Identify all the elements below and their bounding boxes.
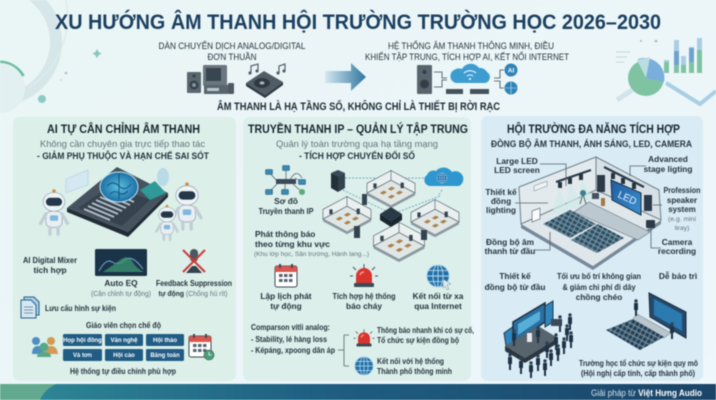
arrow: transition <box>325 63 366 91</box>
label: zone announcements: (Khu lớp học, Sân trường, Hành lang...) <box>254 251 369 258</box>
panel subtitle: Quản lý toàn trường qua hạ tầng mạng <box>276 139 438 150</box>
panel heading: AI TỰ CÂN CHỈNH ÂM THANH <box>47 121 200 136</box>
label: zone announcements <box>254 229 369 258</box>
label: feedback suppression: tự động (Chống hú rít) <box>158 289 228 298</box>
heading: to smart system <box>365 40 569 62</box>
title: XU HƯỚNG ÂM THANH HỘI TRƯỜNG TRƯỜNG HỌC 2026–2030 <box>55 10 661 34</box>
illustration: seminar audience <box>606 293 686 350</box>
label: IP diagram <box>258 196 314 216</box>
callout: camera recording: Camera <box>662 237 693 247</box>
comparison with analog <box>251 323 335 355</box>
callout: professional speaker system: system <box>668 205 696 214</box>
comparison with analog: - Stability, lé hàng loss <box>251 335 327 344</box>
label: save event configuration: Lưu cấu hình sự kiện <box>45 303 116 313</box>
benefit: smart city <box>377 357 452 376</box>
callout: professional speaker system <box>653 186 701 232</box>
mode buttons <box>63 334 184 361</box>
benefit: synchronized design: đồng bộ từ đầu <box>485 282 545 292</box>
callout: synchronized sound <box>485 232 550 256</box>
mode buttons: Hội thảo <box>153 338 177 344</box>
mode buttons: Hội cảo <box>113 353 135 359</box>
label: auto EQ: (Cân chỉnh tự động) <box>91 289 151 298</box>
icon: fire alarm siren <box>350 264 378 287</box>
illustration: campus network <box>323 167 463 262</box>
callout: camera recording <box>651 229 696 256</box>
illustration: hall cutaway: LED <box>616 190 638 208</box>
label: auto schedule: tự động <box>270 301 302 311</box>
mode buttons: Băng toán <box>150 353 180 359</box>
icon: feedback suppression <box>183 249 205 273</box>
label: fire alarm integration: Tích hợp hệ thống <box>332 291 396 301</box>
footer credit: Giải pháp từ Việt Hưng Audio <box>591 388 702 398</box>
illustration: AI digital mixer with brain and robots <box>40 167 201 240</box>
label: feedback suppression: Feedback Suppression <box>156 278 232 288</box>
label: remote internet connection: Kết nối từ xa <box>413 291 464 301</box>
callout: advanced stage lighting <box>630 154 692 176</box>
callout: professional speaker system: speaker <box>667 196 697 205</box>
label: IP diagram: Truyền thanh IP <box>258 206 314 216</box>
callout: large LED screen <box>494 156 566 186</box>
callout: synchronized sound: Đồng bộ âm <box>486 237 534 247</box>
benefit: space and cost optimization <box>557 271 641 302</box>
icon: analog equipment <box>187 64 286 98</box>
icon: schedule calendar <box>275 264 297 287</box>
callout: synchronized sound: thanh từ đầu <box>485 246 535 256</box>
benefit: space and cost optimization: chồng chéo <box>576 292 622 302</box>
benefit: easy maintenance: Dễ bảo trì <box>659 271 697 281</box>
icon: document stack <box>21 297 39 318</box>
panel: AI auto tuning <box>13 117 236 381</box>
panel subtitle: Không cần chuyên gia trực tiếp thao tác <box>40 139 205 150</box>
label: auto EQ: Auto EQ <box>104 278 138 288</box>
icon: calendar with clock <box>189 334 214 360</box>
heading: core message: ÂM THANH LÀ HẠ TẦNG SỐ, KHÔNG CHỈ LÀ THIẾT BỊ RỜI RẠC <box>217 99 500 113</box>
label: IP diagram: Sơ đồ <box>274 196 298 206</box>
panel subtitle: - TÍCH HỢP CHUYỂN ĐỔI SỐ <box>299 150 415 161</box>
heading: to smart system: KHIỂN TẬP TRUNG, TÍCH HỢP AI, KẾT NỐI INTERNET <box>365 51 569 62</box>
mode buttons: Văn nghệ <box>110 338 138 344</box>
caption: large scale events: Trường học tổ chức sự kiện quy mô <box>579 359 698 368</box>
connector arrows <box>338 335 349 366</box>
label: auto schedule <box>260 291 312 311</box>
icon: smart network system <box>417 64 518 94</box>
label: auto schedule: Lập lịch phát <box>260 291 312 301</box>
benefit: quick alerts <box>377 326 474 345</box>
label: remote internet connection <box>413 291 464 311</box>
benefit: synchronized design: Thiết kế <box>499 271 531 281</box>
panel subtitle <box>37 139 209 161</box>
icon: people <box>32 337 58 357</box>
callout: professional speaker system: (e.g. mini <box>668 216 696 223</box>
panel heading <box>491 121 692 149</box>
comparison with analog: Comparson vítli analog: <box>251 323 330 332</box>
panel heading: TRUYỀN THANH IP – QUẢN LÝ TẬP TRUNG <box>248 121 468 136</box>
icon: smart network system: AI <box>508 68 514 74</box>
caption: large scale events <box>579 359 698 378</box>
label: AI digital mixer <box>23 255 78 275</box>
label: teacher selects mode: Giáo viên chọn chế độ <box>86 320 161 330</box>
benefit: smart city: Kết nối với hệ thống <box>377 357 444 366</box>
callout: camera recording: recording <box>658 246 696 256</box>
callout: professional speaker system: Profession <box>664 186 701 195</box>
heading: from analog: ĐƠN THUẦN <box>208 52 256 62</box>
panel: IP broadcast <box>243 117 474 381</box>
callout: lighting design: Thiết kế <box>485 187 517 197</box>
label: auto EQ <box>91 278 151 298</box>
icon: internet globe <box>427 265 451 290</box>
panel heading: ĐỒNG BỘ ÂM THANH, ÁNH SÁNG, LED, CAMERA <box>491 138 692 149</box>
callout: lighting design: đồng <box>491 196 511 206</box>
callout: advanced stage lighting: Advanced <box>648 154 688 164</box>
caption: large scale events: (Hội nghị cấp tỉnh, cấp thành phố) <box>581 369 695 378</box>
icon: small siren <box>354 329 374 346</box>
callout: advanced stage lighting: stage ligting <box>644 164 692 174</box>
label: fire alarm integration <box>332 291 396 311</box>
label: auto adjusting system: Hệ thống tự điều chỉnh phù hợp <box>70 366 176 376</box>
label: AI digital mixer: AI Digital Mixer <box>23 255 78 265</box>
panel heading: HỘI TRƯỜNG ĐA NĂNG TÍCH HỢP <box>507 121 680 136</box>
mode buttons: Và tơn <box>73 353 92 359</box>
mode buttons: Họp hội đồng <box>63 338 102 344</box>
diagram: IP network <box>266 166 306 195</box>
callout: large LED screen: LED screen <box>494 165 540 175</box>
callout: large LED screen: Large LED <box>496 156 538 166</box>
decoration: rings top left <box>0 0 102 113</box>
heading: from analog <box>158 40 306 62</box>
panel: multipurpose hall <box>481 116 703 381</box>
callout: lighting design <box>485 187 548 215</box>
label: feedback suppression <box>156 278 232 298</box>
callout: professional speaker system: liray) <box>675 225 689 232</box>
benefit: synchronized design <box>485 271 545 292</box>
decoration: data chart top right <box>616 38 716 104</box>
illustration: event with crowd <box>504 301 573 378</box>
label: fire alarm integration: báo cháy <box>346 301 382 311</box>
illustration: hall cutaway <box>519 157 661 270</box>
panel subtitle <box>276 139 438 161</box>
icon: auto EQ screen <box>95 249 147 276</box>
heading: from analog: DÀN CHUYỂN DỊCH ANALOG/DIGITAL <box>158 40 306 51</box>
label: AI digital mixer: tích hợp <box>33 265 67 275</box>
footer <box>0 384 716 400</box>
callout: lighting design: lighting <box>486 205 516 215</box>
benefit: smart city: Thành phố thông minh <box>377 367 452 376</box>
label: remote internet connection: qua Internet <box>414 301 462 311</box>
label: zone announcements: theo từng khu vực <box>255 239 330 249</box>
comparison with analog: - Képáng, xpoong dân áp <box>251 346 335 355</box>
label: zone announcements: Phát thông báo <box>255 229 315 239</box>
icon: small globe <box>355 357 373 375</box>
benefit: quick alerts: Tổ chức sự kiện đồng bộ <box>377 336 459 345</box>
benefit: quick alerts: Thông báo nhanh khi có sự cố, <box>377 326 474 335</box>
heading: to smart system: HỆ THỐNG ÂM THANH THÔNG MINH, ĐIỀU <box>388 40 554 51</box>
panel subtitle: - GIẢM PHỤ THUỘC VÀ HẠN CHẾ SAI SÓT <box>37 150 209 161</box>
benefit: space and cost optimization: Tối ưu bố trí không gian <box>557 271 641 281</box>
benefit: space and cost optimization: & giảm chi phí đi dây <box>562 282 636 292</box>
